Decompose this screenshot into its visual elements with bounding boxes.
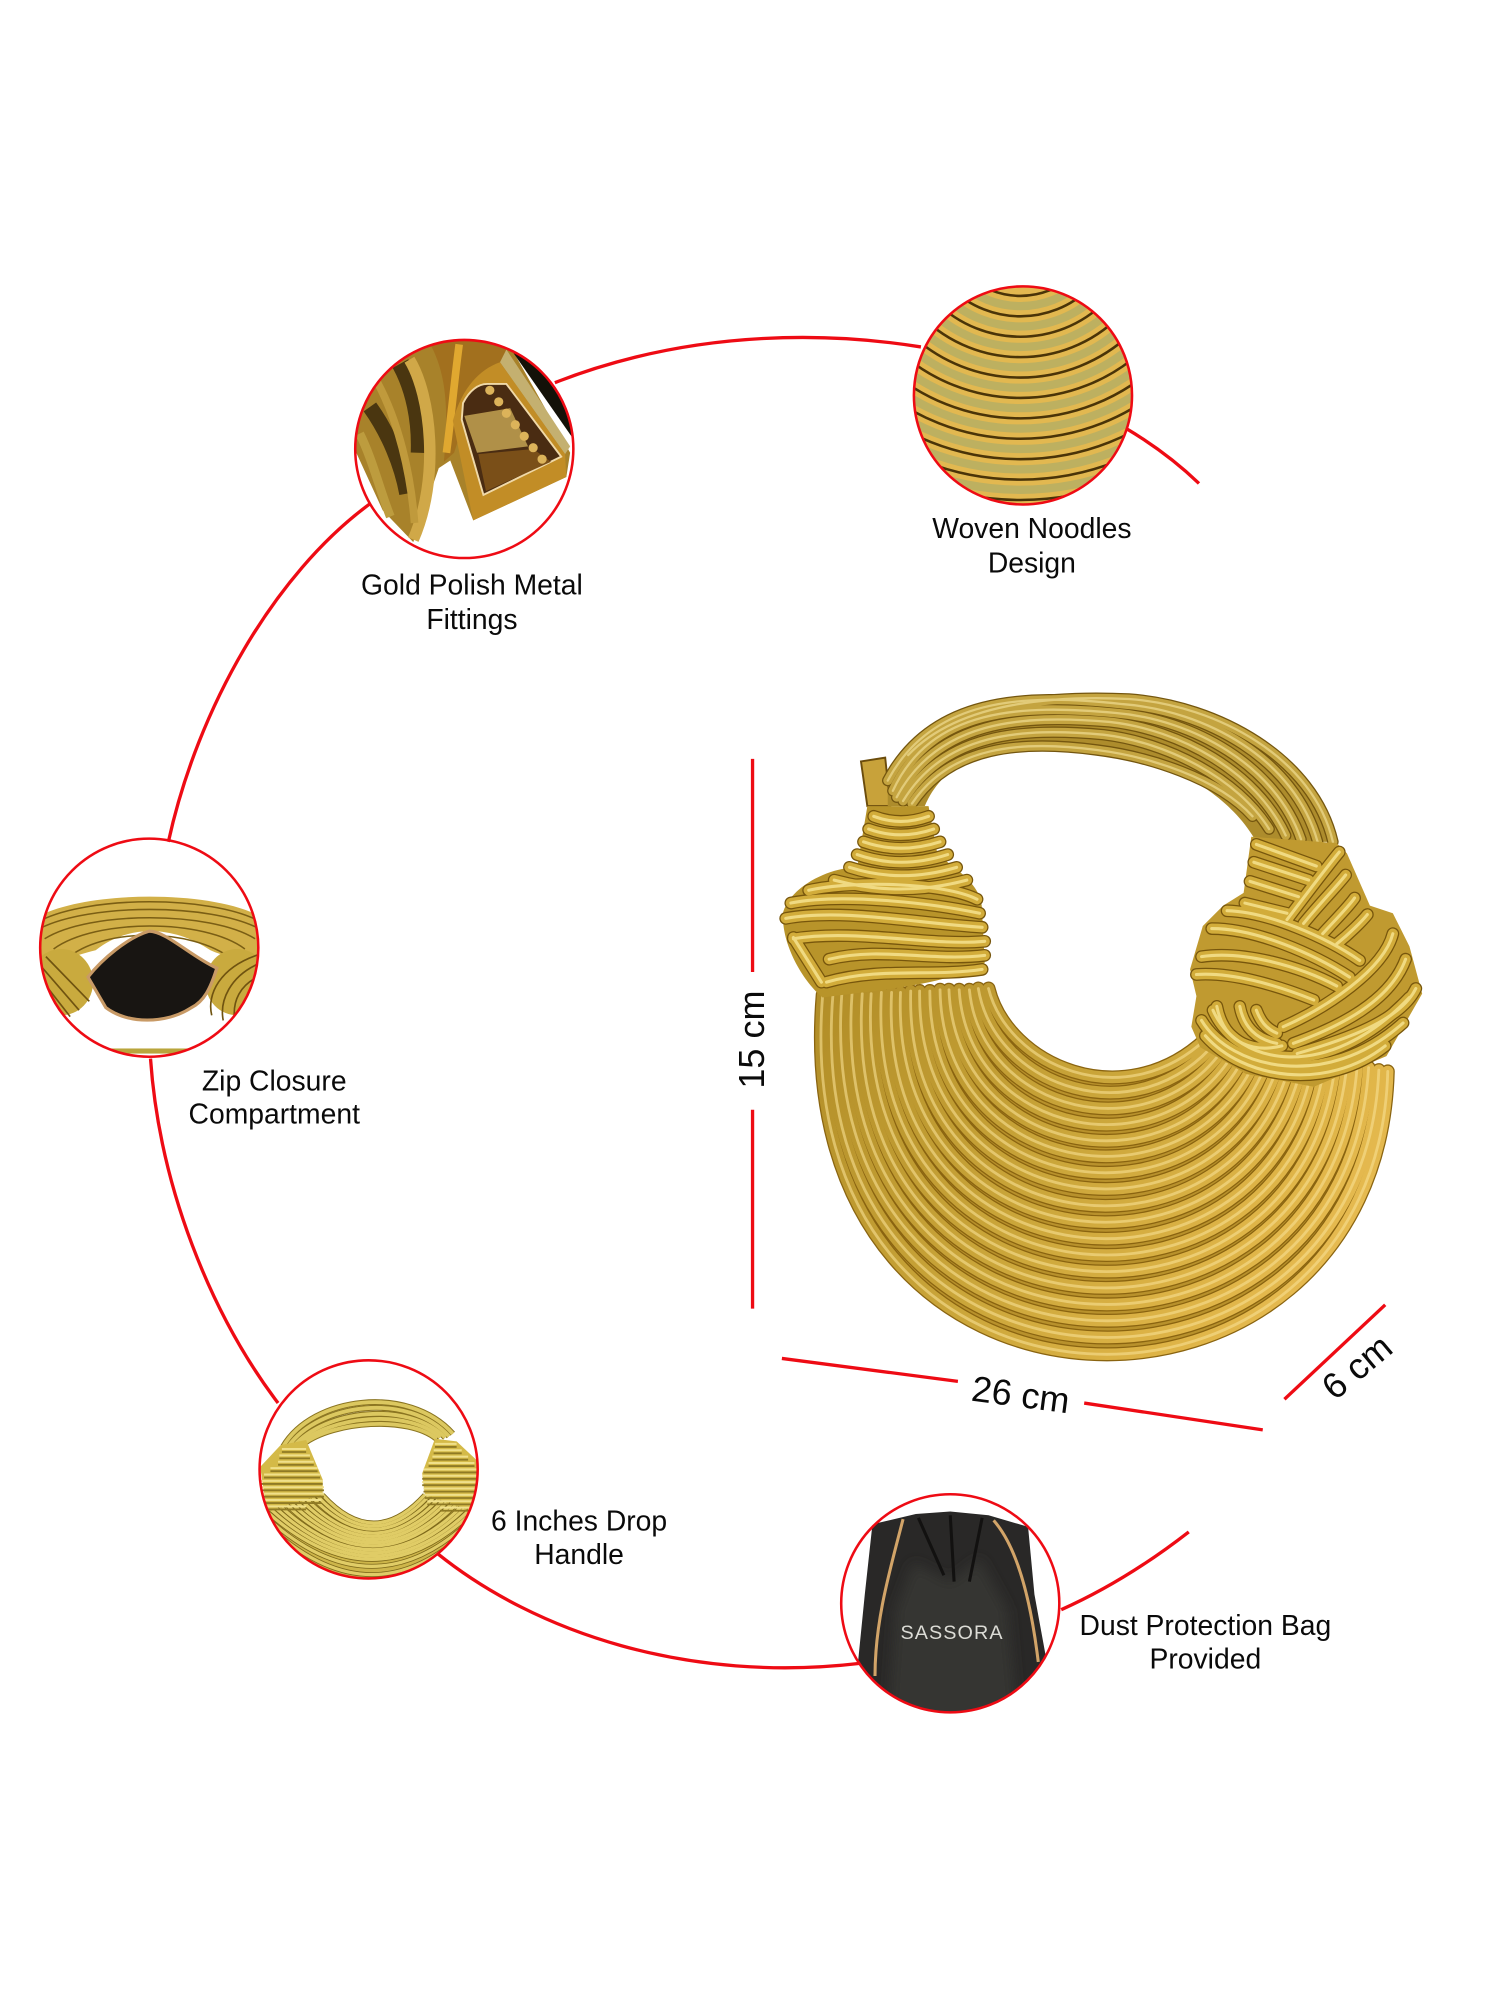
dimension: depth 6 cm: [1284, 1305, 1400, 1408]
woven noodles label: Woven Noodles: [932, 512, 1132, 544]
dimension: width 26 cm: 26 cm: [969, 1368, 1072, 1421]
dimension: width 26 cm: [782, 1358, 1263, 1430]
drop handle label: 6 Inches Drop: [491, 1505, 667, 1537]
dust protection bag label: Provided: [1150, 1642, 1261, 1674]
bag brand text: SASSORA: [901, 1622, 1003, 1644]
infographic canvas: [38, 285, 1422, 1714]
zip closure label: Zip Closure: [202, 1065, 347, 1097]
dimension: height 15 cm: 15 cm: [731, 990, 772, 1089]
zip closure label: Compartment: [189, 1098, 360, 1130]
woven noodles label: Design: [988, 547, 1076, 579]
gold polish metal fittings label: Gold Polish Metal: [361, 568, 583, 600]
dust protection bag label: Dust Protection Bag: [1080, 1609, 1331, 1641]
circle: zip closure detail: [29, 839, 269, 1057]
gold noodle knot handbag: [783, 697, 1422, 1354]
gold polish metal fittings label: Fittings: [426, 603, 518, 635]
circle: gold metal fittings detail: [355, 339, 577, 558]
red connecting arc: [151, 337, 1199, 1668]
circle: drop handle detail: [251, 1360, 489, 1583]
drop handle label: Handle: [534, 1538, 624, 1570]
circle: woven noodles detail: [912, 285, 1134, 506]
circle: dust protection bag detail: [841, 1494, 1059, 1722]
dimension: depth 6 cm: 6 cm: [1314, 1326, 1400, 1408]
